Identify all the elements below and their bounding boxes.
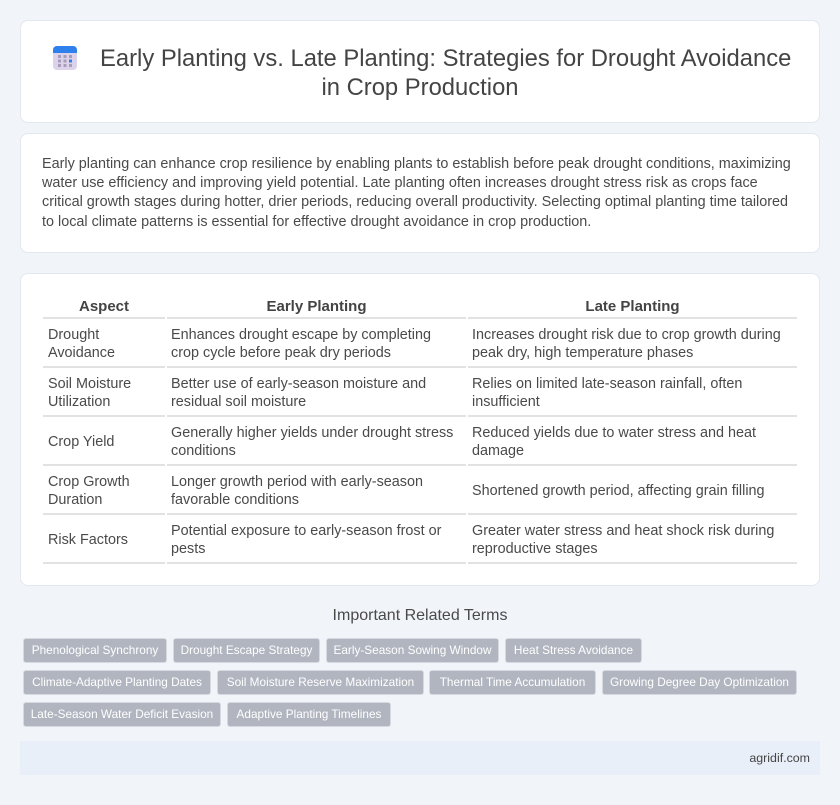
table row: crop yield: damage xyxy=(472,443,524,459)
table row: soil moisture: insufficient xyxy=(472,394,540,410)
table row: drought avoidance xyxy=(48,327,781,361)
heading: related terms: Important Related Terms xyxy=(333,607,507,624)
table row: growth duration: Crop Growth xyxy=(48,474,130,490)
table header xyxy=(79,298,680,315)
text block: summary: to local climate patterns is essential for effective drought avoidance in crop production. xyxy=(42,214,591,230)
table row: soil moisture: Better use of early-season moisture and xyxy=(171,376,426,392)
table header: Late Planting xyxy=(585,298,680,315)
table row: drought avoidance: Avoidance xyxy=(48,345,115,361)
table row: growth duration: Shortened growth period, affecting grain filling xyxy=(472,483,765,499)
related terms tags: Phenological Synchrony xyxy=(32,643,158,657)
text block: summary: critical growth stages during hotter, drier periods, reducing overall productivity. Selecting optimal planting time tailored xyxy=(42,194,788,210)
table row: drought avoidance: Increases drought risk due to crop growth during xyxy=(472,327,781,343)
table row: crop yield: Generally higher yields under drought stress xyxy=(171,425,453,441)
table row: risk factors: Greater water stress and heat shock risk during xyxy=(472,523,774,539)
table row: soil moisture: Soil Moisture xyxy=(48,376,131,392)
table row: soil moisture: residual soil moisture xyxy=(171,394,306,410)
table row: crop yield: Crop Yield xyxy=(48,434,114,450)
related terms tags: Late-Season Water Deficit Evasion xyxy=(31,707,213,721)
table header: Aspect xyxy=(79,298,129,315)
related terms tags: Growing Degree Day Optimization xyxy=(610,675,789,689)
related terms tags: Thermal Time Accumulation xyxy=(440,675,585,689)
related terms tags: Soil Moisture Reserve Maximization xyxy=(227,675,414,689)
text block: summary xyxy=(42,156,791,230)
table row: growth duration: Duration xyxy=(48,492,102,508)
related terms tags: Adaptive Planting Timelines xyxy=(237,707,381,721)
related terms tags: Climate-Adaptive Planting Dates xyxy=(32,675,202,689)
table row: crop yield: conditions xyxy=(171,443,236,459)
icon: calendar xyxy=(53,46,77,70)
table row: drought avoidance: Enhances drought escape by completing xyxy=(171,327,431,343)
related terms tags xyxy=(23,638,797,727)
title: in Crop Production xyxy=(321,74,519,101)
table row: risk factors: Risk Factors xyxy=(48,532,128,548)
table row: crop yield: Reduced yields due to water stress and heat xyxy=(472,425,756,441)
table row: drought avoidance: peak dry, high temperature phases xyxy=(472,345,693,361)
table row: crop yield xyxy=(48,425,756,459)
table row: risk factors xyxy=(48,523,774,557)
title: Early Planting vs. Late Planting: Strategies for Drought Avoidance xyxy=(100,45,791,72)
panel: comparison table xyxy=(20,273,820,586)
table row: growth duration xyxy=(48,474,765,508)
table header: Early Planting xyxy=(266,298,367,315)
table row: soil moisture xyxy=(48,376,742,410)
footer source text: agridif.com xyxy=(749,751,810,765)
table row: drought avoidance: Drought xyxy=(48,327,99,343)
table row: risk factors: reproductive stages xyxy=(472,541,598,557)
text block: summary: water use efficiency and improving yield potential. Late planting often increases drought stress risk as crops face xyxy=(42,175,758,191)
table row: soil moisture: Utilization xyxy=(48,394,110,410)
footer xyxy=(20,741,820,775)
related terms tags: Drought Escape Strategy xyxy=(181,643,312,657)
table row: growth duration: favorable conditions xyxy=(171,492,299,508)
related terms tags: Early-Season Sowing Window xyxy=(333,643,492,657)
table row: risk factors: Potential exposure to early-season frost or xyxy=(171,523,441,539)
panel: summary paragraph xyxy=(20,133,820,253)
table row: growth duration: Longer growth period with early-season xyxy=(171,474,423,490)
table row: soil moisture: Relies on limited late-season rainfall, often xyxy=(472,376,742,392)
panel: header xyxy=(20,20,820,123)
table row: drought avoidance: crop cycle before peak dry periods xyxy=(171,345,391,361)
table row: risk factors: pests xyxy=(171,541,205,557)
text block: summary: Early planting can enhance crop resilience by enabling plants to establish before peak drought conditions, maximizing xyxy=(42,156,791,172)
title xyxy=(100,45,791,101)
related terms tags: Heat Stress Avoidance xyxy=(514,643,633,657)
